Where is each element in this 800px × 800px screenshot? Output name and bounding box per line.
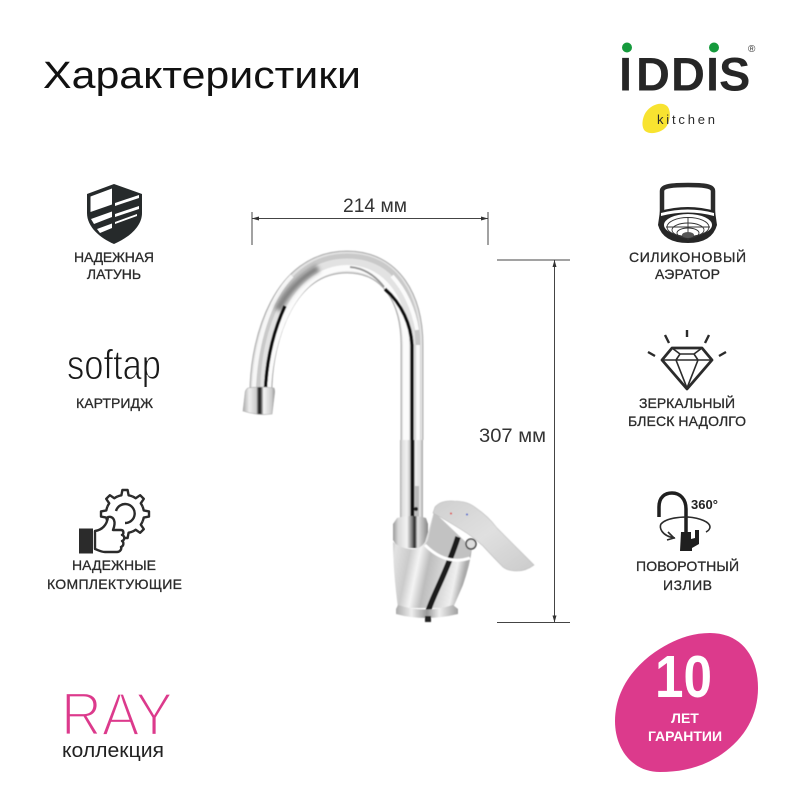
warranty badge: ЛЕТ <box>671 710 699 726</box>
label: swivel spout: ПОВОРОТНЫЙ <box>636 557 739 574</box>
collection name RAY: RAY <box>61 681 173 748</box>
collection caption: коллекция <box>62 740 164 762</box>
logo: IDDIS kitchen <box>619 42 756 133</box>
dimension: height 307 mm: 307 мм <box>479 426 546 447</box>
icon: diamond <box>648 330 726 389</box>
icon: aerator <box>658 185 717 243</box>
warranty badge: 10 <box>655 644 712 710</box>
icon: shield <box>87 184 142 244</box>
logo: IDDIS kitchen: ® <box>748 44 756 55</box>
label: cartridge: КАРТРИДЖ <box>76 395 153 411</box>
faucet spout <box>254 256 418 440</box>
faucet nozzle <box>243 387 275 415</box>
faucet body <box>393 512 472 608</box>
title: Характеристики <box>43 55 361 97</box>
label: brass: НАДЕЖНАЯ <box>74 249 154 265</box>
warranty badge <box>615 633 758 772</box>
logo: IDDIS kitchen: IDDIS <box>619 48 750 100</box>
label: brass: ЛАТУНЬ <box>87 266 141 282</box>
softap logo: softap <box>67 341 161 388</box>
label: mirror shine: ЗЕРКАЛЬНЫЙ <box>639 394 735 411</box>
dimension: width 214 mm: 214 мм <box>343 196 407 217</box>
faucet riser <box>400 440 423 520</box>
dimension: width 214 mm <box>252 196 488 245</box>
label: aerator: АЭРАТОР <box>655 266 720 282</box>
faucet <box>243 256 534 622</box>
logo: IDDIS kitchen: kitchen <box>657 112 715 127</box>
label: components: КОМПЛЕКТУЮЩИЕ <box>47 576 182 592</box>
icon: gear and thumb <box>79 490 149 554</box>
label: aerator: СИЛИКОНОВЫЙ <box>629 248 746 265</box>
label: components: НАДЕЖНЫЕ <box>72 557 156 573</box>
warranty badge: ГАРАНТИИ <box>648 728 722 744</box>
label: swivel spout: ИЗЛИВ <box>663 577 712 593</box>
faucet handle <box>433 501 534 571</box>
icon: rotating spout 360: 360° <box>691 497 718 512</box>
faucet base <box>396 605 458 618</box>
label: mirror shine: БЛЕСК НАДОЛГО <box>628 413 746 429</box>
faucet screw <box>466 539 476 549</box>
dimension: height 307 mm <box>479 260 570 622</box>
icon: rotating spout 360 <box>659 493 718 551</box>
faucet collar <box>393 516 428 548</box>
